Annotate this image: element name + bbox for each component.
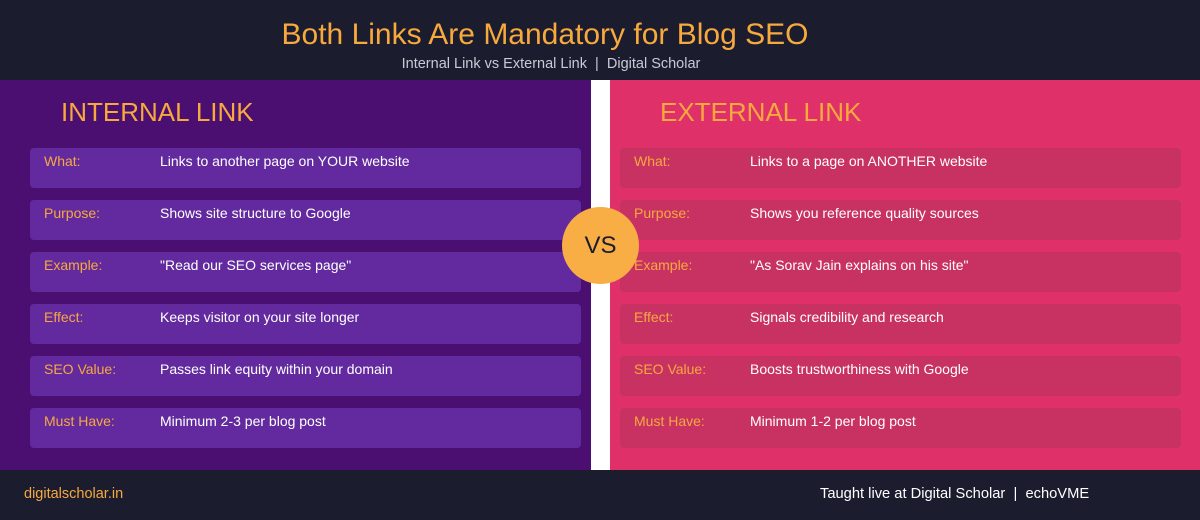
panel: internal link: Links to another page on YOUR website — [160, 153, 410, 169]
external rows: Purpose: — [634, 205, 690, 221]
panel: external link — [610, 80, 1200, 470]
external rows: SEO Value: — [634, 361, 706, 377]
external rows: Boosts trustworthiness with Google — [750, 361, 969, 377]
panel: internal link: What: — [44, 153, 81, 169]
subtitle: Internal Link vs External Link | Digital Scholar — [402, 56, 700, 72]
external rows — [620, 148, 1181, 448]
external rows: Links to a page on ANOTHER website — [750, 153, 987, 169]
panel: internal link: Shows site structure to Google — [160, 205, 351, 221]
panel: internal link: Must Have: — [44, 413, 115, 429]
header — [0, 0, 1200, 80]
panel: internal link: Example: — [44, 257, 102, 273]
heading: internal link: INTERNAL LINK — [61, 97, 254, 127]
panel: internal link: Minimum 2-3 per blog post — [160, 413, 326, 429]
footer left: digitalscholar.in — [24, 486, 123, 502]
external rows: Must Have: — [634, 413, 705, 429]
footer right: Taught live at Digital Scholar | echoVME — [820, 486, 1089, 502]
panel: internal link: "Read our SEO services page" — [160, 257, 351, 273]
panel: internal link: Purpose: — [44, 205, 100, 221]
external rows: Signals credibility and research — [750, 309, 944, 325]
panel: internal link — [0, 80, 591, 470]
footer — [0, 470, 1200, 520]
panel: internal link: Effect: — [44, 309, 83, 325]
external rows: Example: — [634, 257, 692, 273]
panel: internal link: Keeps visitor on your site longer — [160, 309, 359, 325]
external rows: Minimum 1-2 per blog post — [750, 413, 916, 429]
external rows: Shows you reference quality sources — [750, 205, 979, 221]
external rows: "As Sorav Jain explains on his site" — [750, 257, 968, 273]
icon: VS circle — [562, 207, 639, 284]
heading: external link: EXTERNAL LINK — [660, 97, 861, 127]
panel: internal link: SEO Value: — [44, 361, 116, 377]
external rows: What: — [634, 153, 671, 169]
panel: internal link: Passes link equity within your domain — [160, 361, 393, 377]
external rows: Effect: — [634, 309, 673, 325]
icon: VS circle: VS — [584, 232, 616, 259]
title: Both Links Are Mandatory for Blog SEO — [282, 18, 808, 51]
